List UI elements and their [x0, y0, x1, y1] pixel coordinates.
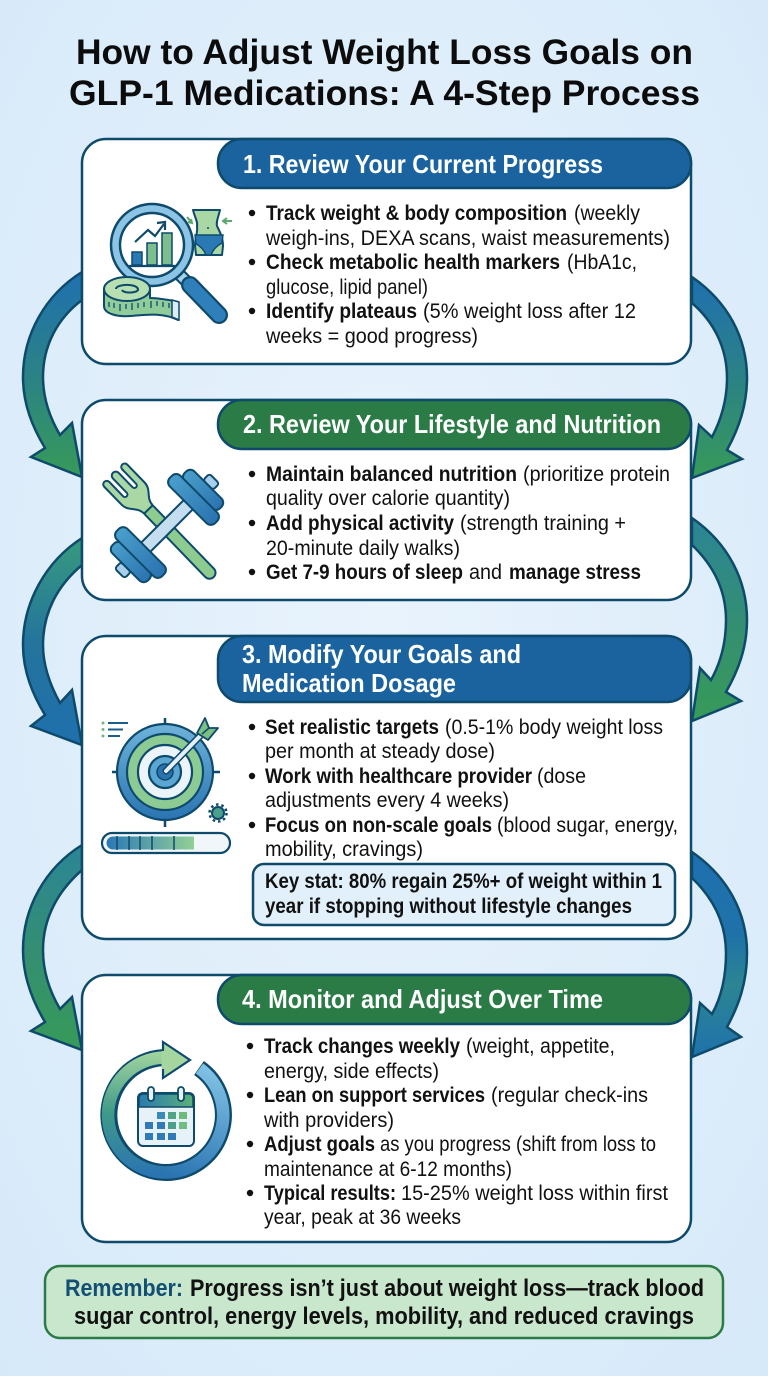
arrow: step 3 to step 4, right	[692, 852, 747, 1057]
step 4 bullet list: Lean on support services	[264, 1084, 485, 1107]
step 2 bullet list	[249, 463, 670, 584]
dumbbell	[97, 456, 237, 596]
title: How to Adjust Weight Loss Goals on	[76, 33, 693, 72]
step 4 bullet list: (weight, appetite,	[466, 1035, 615, 1058]
gear	[210, 804, 226, 822]
step 1 bullet list: glucose, lipid panel)	[266, 276, 428, 299]
panel: step 1	[82, 139, 691, 364]
step 1 bullet list: weeks = good progress)	[265, 325, 478, 348]
callout: key stat	[253, 864, 675, 925]
step 2 heading	[218, 400, 691, 449]
icon: fork and dumbbell	[97, 456, 237, 596]
step 3 heading: Medication Dosage	[242, 668, 456, 698]
measuring tape	[104, 277, 179, 320]
rising bar chart	[129, 222, 175, 266]
step 1 bullet list: (weekly	[574, 202, 640, 225]
callout: remember	[45, 1266, 723, 1338]
panel: step 2	[82, 400, 691, 600]
step 4 bullet list: Adjust goals	[264, 1133, 375, 1156]
arrow: step 1 to step 2, left	[23, 272, 82, 477]
step 3 bullet list: adjustments every 4 weeks)	[265, 789, 509, 812]
step 3 bullet list: (blood sugar, energy,	[497, 814, 678, 837]
icon: cycle arrow and calendar	[108, 1042, 223, 1173]
step 4 bullet list: year, peak at 36 weeks	[264, 1206, 461, 1229]
step 1 bullet list: Check metabolic health markers	[266, 251, 560, 274]
step 2 bullet list: (strength training +	[460, 512, 626, 535]
dart	[166, 718, 218, 771]
magnifier handle	[178, 273, 219, 315]
step 4 bullet list: maintenance at 6-12 months)	[264, 1158, 512, 1181]
step 2 bullet list: and	[469, 561, 502, 584]
arrow: step 2 to step 3, right	[692, 518, 747, 721]
step 3 heading	[218, 636, 691, 702]
icon: target, list, gear and progress bar	[102, 718, 230, 853]
step 1 bullet list: Identify plateaus	[266, 300, 417, 323]
step 4 heading: 4. Monitor and Adjust Over Time	[242, 984, 603, 1014]
target	[112, 718, 220, 827]
callout: key stat: Key stat: 80% regain 25%+ of weight within 1	[265, 870, 662, 893]
step 4 bullet list	[247, 1035, 668, 1229]
step 2 bullet list: 20-minute daily walks)	[266, 537, 460, 560]
callout: remember: sugar control, energy levels, mobility, and reduced cravings	[74, 1303, 694, 1330]
callout: key stat: year if stopping without lifestyle changes	[265, 895, 632, 918]
step 4 bullet list: Track changes weekly	[264, 1035, 460, 1058]
step 1 heading: 1. Review Your Current Progress	[243, 149, 603, 179]
step 2 heading: 2. Review Your Lifestyle and Nutrition	[243, 409, 661, 439]
waist figure	[187, 210, 232, 255]
fork	[101, 462, 225, 588]
step 4 bullet list: as you progress (shift from loss to	[380, 1133, 656, 1156]
step 3 bullet list: (dose	[537, 765, 586, 788]
step 3 bullet list: Work with healthcare provider	[265, 765, 532, 788]
step 1 bullet list	[249, 202, 670, 348]
step 1 bullet list: Track weight & body composition	[266, 202, 567, 225]
step 4 bullet list: 15-25% weight loss within first	[401, 1182, 668, 1205]
title	[69, 33, 700, 113]
icon: magnifier, chart, waist and tape	[104, 204, 232, 320]
step 1 bullet list: (HbA1c,	[567, 251, 637, 274]
step 2 bullet list: Maintain balanced nutrition	[266, 463, 517, 486]
step 3 bullet list: per month at steady dose)	[265, 740, 495, 763]
step 1 heading	[218, 139, 691, 188]
step 3 bullet list: (0.5-1% body weight loss	[445, 716, 663, 739]
arrow: step 3 to step 4, left	[23, 845, 82, 1050]
step 4 bullet list: with providers)	[263, 1109, 394, 1132]
step 3 bullet list	[249, 716, 678, 861]
callout: remember: Progress isn’t just about weight loss—track blood	[190, 1275, 704, 1302]
callout: remember: Remember:	[65, 1275, 183, 1302]
step 4 bullet list: energy, side effects)	[264, 1060, 439, 1083]
step 3 heading: 3. Modify Your Goals and	[242, 639, 521, 669]
step 2 bullet list: Get 7-9 hours of sleep	[266, 561, 463, 584]
step 2 bullet list: Add physical activity	[266, 512, 454, 535]
step 4 bullet list: (regular check-ins	[491, 1084, 648, 1107]
step 2 bullet list: (prioritize protein	[523, 463, 670, 486]
title: GLP-1 Medications: A 4-Step Process	[69, 74, 700, 113]
arrow: step 2 to step 3, left	[23, 538, 82, 745]
calendar	[138, 1087, 194, 1146]
arrow: step 1 to step 2, right	[692, 277, 747, 478]
progress bar	[102, 833, 230, 853]
magnifier lens	[111, 204, 193, 286]
checklist lines	[102, 722, 128, 738]
panel: step 3	[82, 636, 691, 939]
step 3 bullet list: mobility, cravings)	[265, 838, 423, 861]
panel: step 4	[82, 975, 691, 1242]
step 4 heading	[218, 975, 691, 1024]
step 1 bullet list: (5% weight loss after 12	[423, 300, 636, 323]
step 2 bullet list: manage stress	[509, 561, 641, 584]
step 1 bullet list: weigh-ins, DEXA scans, waist measurements)	[265, 227, 670, 250]
cycle ring	[108, 1042, 223, 1173]
step 2 bullet list: quality over calorie quantity)	[266, 487, 510, 510]
step 3 bullet list: Focus on non-scale goals	[265, 814, 492, 837]
step 3 bullet list: Set realistic targets	[265, 716, 439, 739]
step 4 bullet list: Typical results:	[264, 1182, 396, 1205]
